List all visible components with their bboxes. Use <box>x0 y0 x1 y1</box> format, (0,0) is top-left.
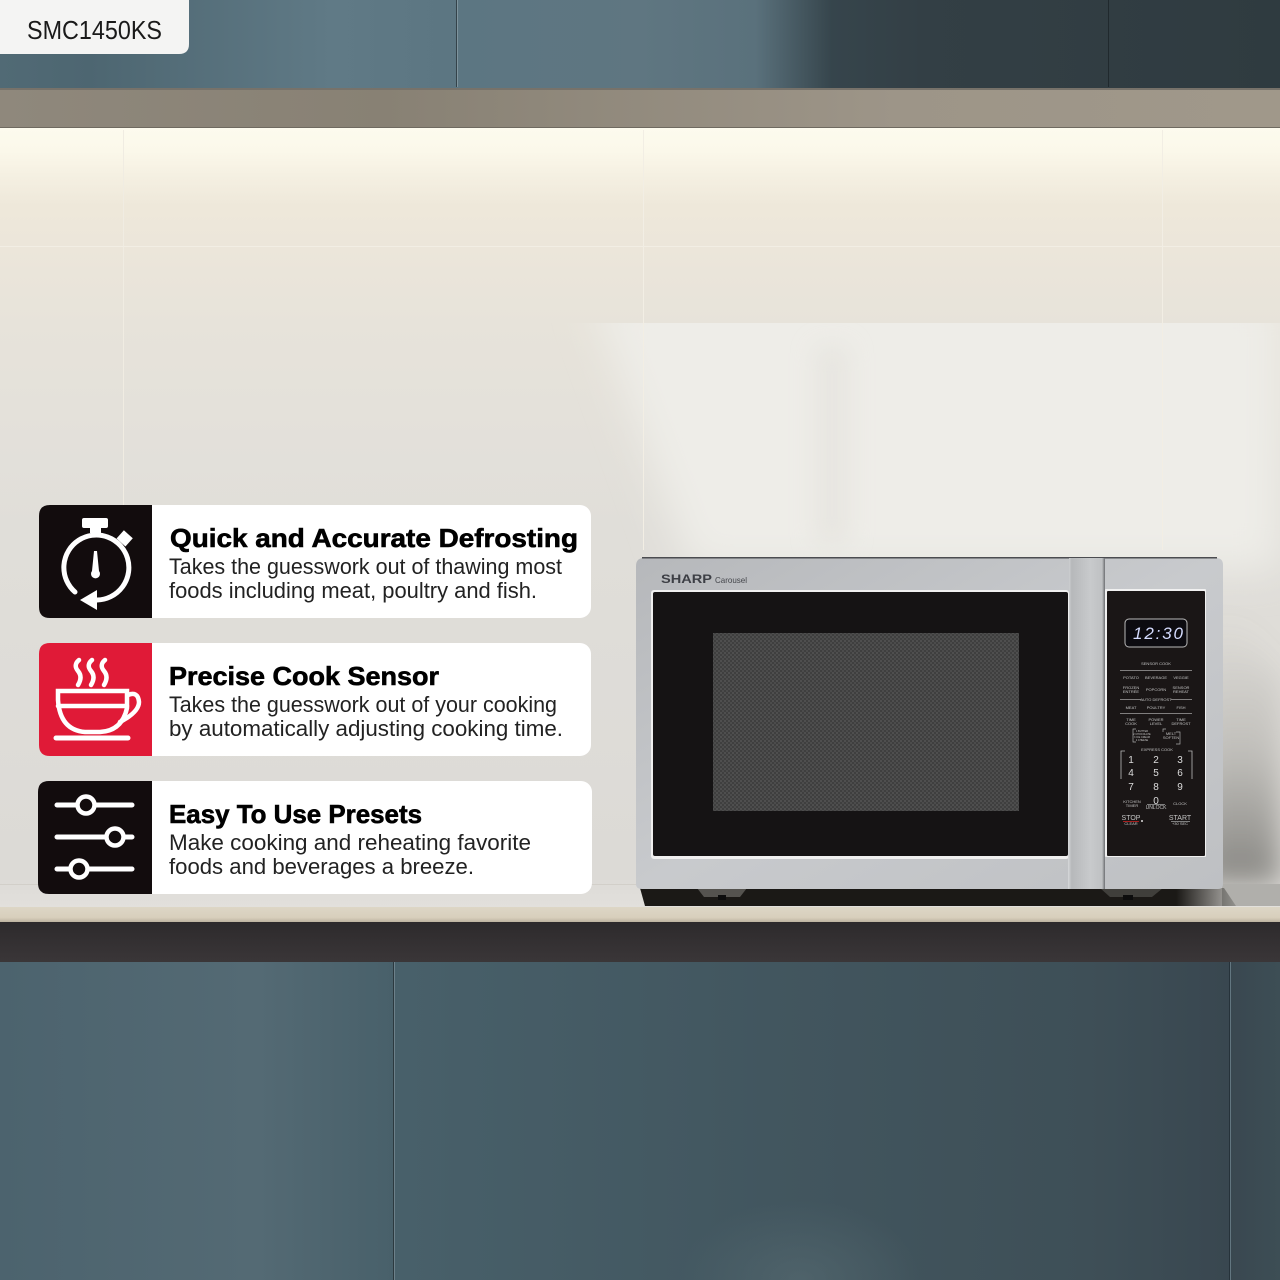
panel buttons: START <box>1169 815 1192 822</box>
light patch on wall <box>608 323 1278 570</box>
description <box>169 830 531 879</box>
panel buttons: 5 <box>1153 768 1159 779</box>
door handle <box>1068 558 1105 889</box>
background: shelf underside <box>0 88 1280 128</box>
panel buttons: 9 <box>1177 782 1183 793</box>
door mesh window <box>713 633 1019 811</box>
panel buttons: SENSOR COOK <box>1141 661 1171 666</box>
panel buttons: 2 <box>1153 755 1159 766</box>
control panel <box>1105 589 1206 857</box>
panel buttons: ENTRÉE <box>1123 689 1139 694</box>
panel buttons: 1 BUTTER <box>1136 730 1148 733</box>
panel buttons: 4 <box>1128 768 1134 779</box>
panel buttons: POWER <box>1148 717 1164 722</box>
clock display <box>1125 619 1187 647</box>
panel buttons: LEVEL <box>1150 721 1163 726</box>
panel buttons: 4 CHEESE <box>1136 739 1149 742</box>
description: Takes the guesswork out of thawing most <box>169 554 562 579</box>
logo <box>661 574 747 586</box>
microwave <box>636 557 1223 900</box>
panel buttons: 3 <box>1177 755 1183 766</box>
panel buttons: VEGGIE <box>1173 675 1189 680</box>
panel buttons: 2 CHOCOLATE <box>1133 733 1151 736</box>
icon: sliders <box>38 781 152 894</box>
panel buttons: TIME <box>1176 717 1186 722</box>
background: counter edge <box>0 922 1280 962</box>
panel buttons: REHEAT <box>1173 689 1190 694</box>
panel buttons: POPCORN <box>1146 687 1166 692</box>
description <box>169 692 563 741</box>
panel buttons: COOK <box>1125 721 1137 726</box>
feature card: presets <box>38 781 592 894</box>
panel buttons: +30 SEC <box>1172 821 1188 826</box>
panel buttons: TIMER <box>1126 803 1138 808</box>
microwave feet <box>697 888 1163 900</box>
panel buttons: 6 <box>1177 768 1183 779</box>
background: lower cabinets <box>0 962 1280 1280</box>
microwave shadow on wall <box>1223 656 1280 884</box>
background: tiled wall <box>0 128 1280 908</box>
panel buttons: SOFTEN <box>1163 735 1179 740</box>
panel buttons: 3 ICE CREAM <box>1134 736 1150 739</box>
panel buttons: POULTRY <box>1147 705 1166 710</box>
panel buttons: 1 <box>1128 755 1134 766</box>
logo: Carousel <box>715 575 747 585</box>
microwave shadow on counter <box>640 888 1236 906</box>
heading: Precise Cook Sensor <box>169 661 439 691</box>
panel buttons: FISH <box>1176 705 1186 710</box>
panel buttons: MEAT <box>1126 705 1137 710</box>
panel buttons: AUTO DEFROST <box>1140 697 1172 702</box>
feature card: cook sensor <box>39 643 591 756</box>
model tag: SMC1450KS <box>27 15 162 45</box>
icon: stopwatch <box>39 505 152 618</box>
description <box>169 554 562 603</box>
feature card: defrosting <box>39 505 591 618</box>
panel buttons: FROZEN <box>1123 685 1139 690</box>
description: Takes the guesswork out of your cooking <box>169 692 557 717</box>
description: by automatically adjusting cooking time. <box>169 716 563 741</box>
description: foods including meat, poultry and fish. <box>169 578 537 603</box>
panel buttons: KITCHEN <box>1123 799 1141 804</box>
panel buttons: POTATO <box>1123 675 1139 680</box>
panel buttons: DEFROST <box>1171 721 1191 726</box>
model tag <box>0 0 189 54</box>
icon: steaming cup <box>39 643 152 756</box>
panel buttons: MELT <box>1166 731 1177 736</box>
panel buttons: 8 <box>1153 782 1159 793</box>
microwave body <box>636 558 1223 889</box>
panel buttons: 0 <box>1153 796 1159 807</box>
heading: Quick and Accurate Defrosting <box>170 523 578 553</box>
panel buttons: STOP <box>1122 815 1141 822</box>
description: foods and beverages a breeze. <box>169 854 474 879</box>
panel buttons: TIME <box>1126 717 1136 722</box>
panel buttons: BEVERAGE <box>1145 675 1167 680</box>
panel buttons: UNLOCK <box>1146 805 1167 811</box>
door window frame <box>651 590 1069 859</box>
panel buttons: 7 <box>1128 782 1134 793</box>
background: countertop <box>0 884 1280 922</box>
panel buttons: SENSOR <box>1173 685 1190 690</box>
logo: SHARP <box>661 574 712 586</box>
clock display: 12:30 <box>1133 624 1184 643</box>
background: upper cabinets <box>0 0 1280 88</box>
panel buttons: EXPRESS COOK <box>1141 747 1173 752</box>
heading: Easy To Use Presets <box>169 799 422 829</box>
panel buttons: CLOCK <box>1173 801 1187 806</box>
panel buttons: CLEAR <box>1124 821 1138 826</box>
description: Make cooking and reheating favorite <box>169 830 531 855</box>
panel buttons <box>1120 661 1192 826</box>
